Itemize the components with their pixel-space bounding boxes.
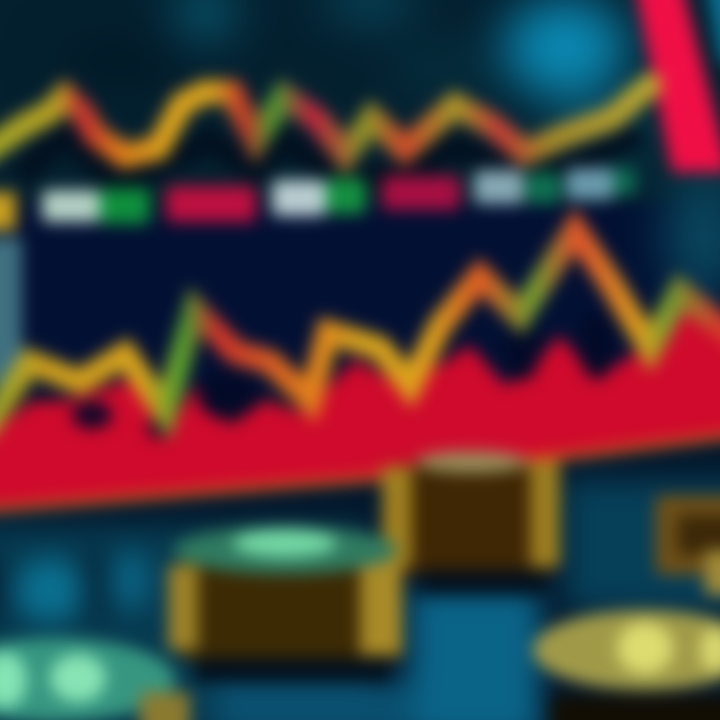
- coin: bottom left mint: [0, 638, 190, 720]
- lower line chart: [0, 230, 720, 428]
- coin body: [168, 560, 402, 660]
- background glow: teal highlights: [50, 0, 720, 300]
- coin shadow: [420, 570, 545, 594]
- lower band: teal floor: [0, 480, 720, 720]
- dark troughs under the lower line: [72, 311, 615, 438]
- red area chart: [0, 305, 720, 510]
- coin stack: centre left green top: [168, 526, 402, 682]
- coin top: [0, 638, 175, 720]
- coin stack: centre tall: [382, 451, 560, 594]
- coin: bottom right yellow: [533, 610, 720, 720]
- coin edge: [140, 692, 190, 720]
- coin shadow: [195, 658, 390, 682]
- orange base edge of red area: [0, 434, 720, 510]
- upper line shadow: [20, 135, 640, 185]
- upper line chart: [0, 85, 650, 156]
- coin top: [416, 451, 528, 473]
- coin body: [655, 495, 720, 595]
- coin side: [550, 696, 720, 720]
- red diagonal bar top right: [632, 0, 720, 172]
- coin stack: right edge: [655, 495, 720, 595]
- coin top: [173, 526, 397, 574]
- coin top: [533, 610, 720, 690]
- left gauge edge: [0, 192, 22, 388]
- legend pills row: [42, 168, 636, 224]
- coin body: [382, 462, 560, 575]
